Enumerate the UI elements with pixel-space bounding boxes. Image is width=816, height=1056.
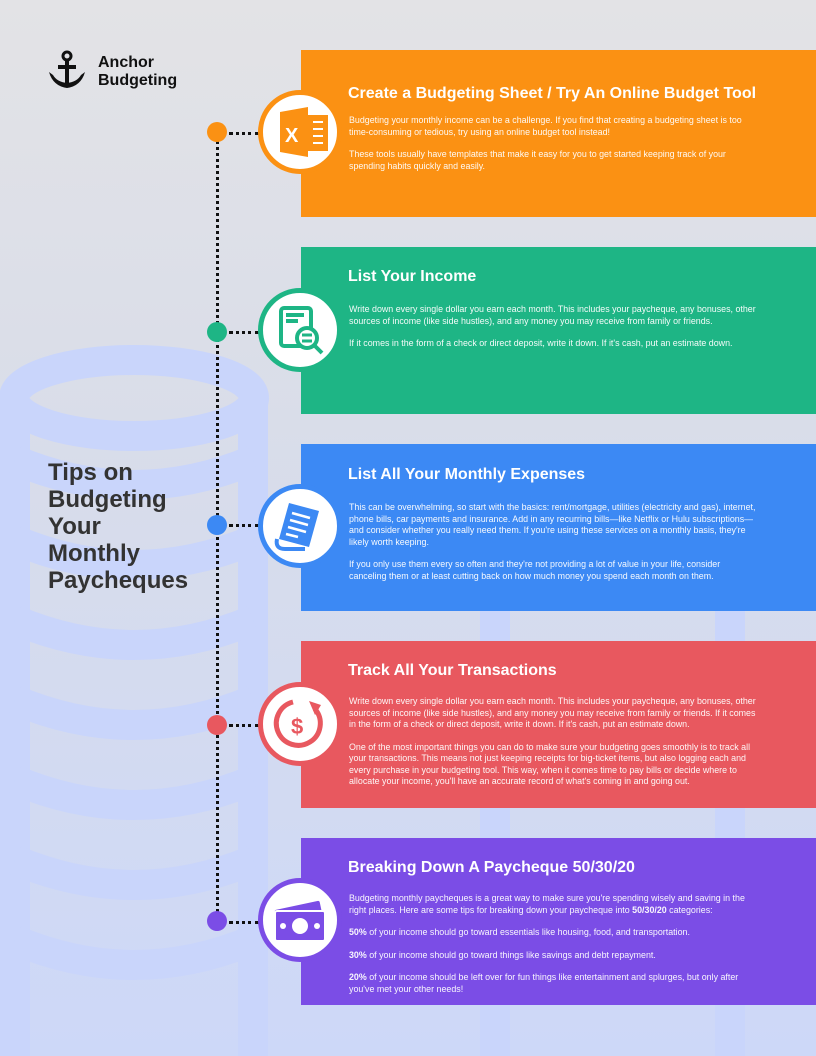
panel: income: Write down every single dollar you earn each month. This includes your paycheque, any bonuses, other sources of income (like side hustles), and any money you may receive from family or friends. bbox=[349, 304, 756, 326]
panel: create sheet: These tools usually have templates that make it easy for you to get started keeping track of your spending habits quickly and easily. bbox=[349, 149, 726, 170]
dot 4 bbox=[207, 715, 227, 735]
dot 5 bbox=[207, 911, 227, 931]
panel: transactions: One of the most important things you can do to make sure your budgeting goes smoothly is to track all your transactions. This means not just keeping receipts for big-ticket items, but also logging each and every purchase in your budgeting tool. This way, when it comes time to pay bills or decide where to allocate your income, you'll have an accurate record of what's coming in and going out. bbox=[349, 742, 750, 786]
panel: create sheet: Create a Budgeting Sheet / Try An Online Budget Tool bbox=[348, 85, 756, 102]
panel: create sheet bbox=[301, 50, 816, 217]
panel: income: List Your Income bbox=[348, 268, 476, 285]
icon: anchor bbox=[49, 50, 85, 88]
panel: income: If it comes in the form of a check or direct deposit, write it down. If it's cash, put an estimate down. bbox=[349, 338, 732, 348]
dot 2 bbox=[207, 322, 227, 342]
panel: expenses bbox=[301, 444, 816, 611]
icon: document search bbox=[258, 288, 342, 372]
panel: 50/30/20 bbox=[301, 838, 816, 1005]
panel: 50/30/20: Budgeting monthly paycheques is a great way to make sure you're spending wisely and saving in the right places. Here are some tips for breaking down your paycheque into 50/30/20 categories: bbox=[349, 893, 745, 914]
panel: create sheet: Budgeting your monthly income can be a challenge. If you find that creating a budgeting sheet is too time-consuming or tedious, try using an online budget tool instead! bbox=[349, 115, 742, 136]
panel: 50/30/20: 20% of your income should be left over for fun things like entertainment and splurges, but only after you've met your other needs! bbox=[349, 972, 738, 994]
icon: excel: X bbox=[285, 125, 299, 147]
title: Paycheques bbox=[48, 567, 188, 594]
panel: transactions: Track All Your Transactions bbox=[348, 662, 557, 679]
panel: 50/30/20: 30% of your income should go toward things like savings and debt repayment. bbox=[349, 950, 656, 960]
icon: receipt bbox=[258, 484, 342, 568]
panel: expenses: List All Your Monthly Expenses bbox=[348, 466, 585, 483]
panel: transactions: Write down every single dollar you earn each month. This includes your paycheque, any bonuses, other sources of income (like side hustles), and any money you may receive from family or friends. If it comes in the form of a check or direct deposit, write it down. If it's cash, put an estimate down. bbox=[349, 696, 756, 729]
panel: expenses: This can be overwhelming, so start with the basics: rent/mortgage, utilities (electricity and gas), internet, phone bills, car payments and insurance. Add in any recurring bills—like Netflix or Hulu subscriptions—and consider whether you really need them. If you're using these services on a monthly basis, they're likely worth keeping. bbox=[349, 502, 755, 546]
dot 1 bbox=[207, 122, 227, 142]
panel: transactions bbox=[301, 641, 816, 808]
logo bbox=[49, 50, 177, 89]
panel: 50/30/20: Breaking Down A Paycheque 50/30/20 bbox=[348, 859, 635, 876]
panel: 50/30/20: 50% of your income should go toward essentials like housing, food, and transportation. bbox=[349, 927, 690, 937]
logo: Anchor bbox=[98, 54, 154, 71]
title: Your bbox=[48, 513, 101, 540]
icon: dollar cycle: $ bbox=[291, 714, 303, 739]
title: Tips on bbox=[48, 459, 133, 486]
panel: income bbox=[301, 247, 816, 414]
icon: dollar cycle bbox=[258, 682, 342, 766]
icon: excel bbox=[258, 90, 342, 174]
title: Budgeting bbox=[48, 486, 167, 513]
timeline vertical line bbox=[216, 140, 219, 920]
title bbox=[48, 459, 188, 594]
dot 3 bbox=[207, 515, 227, 535]
title: Monthly bbox=[48, 540, 140, 567]
panel: expenses: If you only use them every so often and they're not providing a lot of value in your life, consider canceling them or at least cutting back on how much money you spend each month on them. bbox=[349, 559, 720, 580]
logo: Budgeting bbox=[98, 72, 177, 89]
icon: money bbox=[258, 878, 342, 962]
